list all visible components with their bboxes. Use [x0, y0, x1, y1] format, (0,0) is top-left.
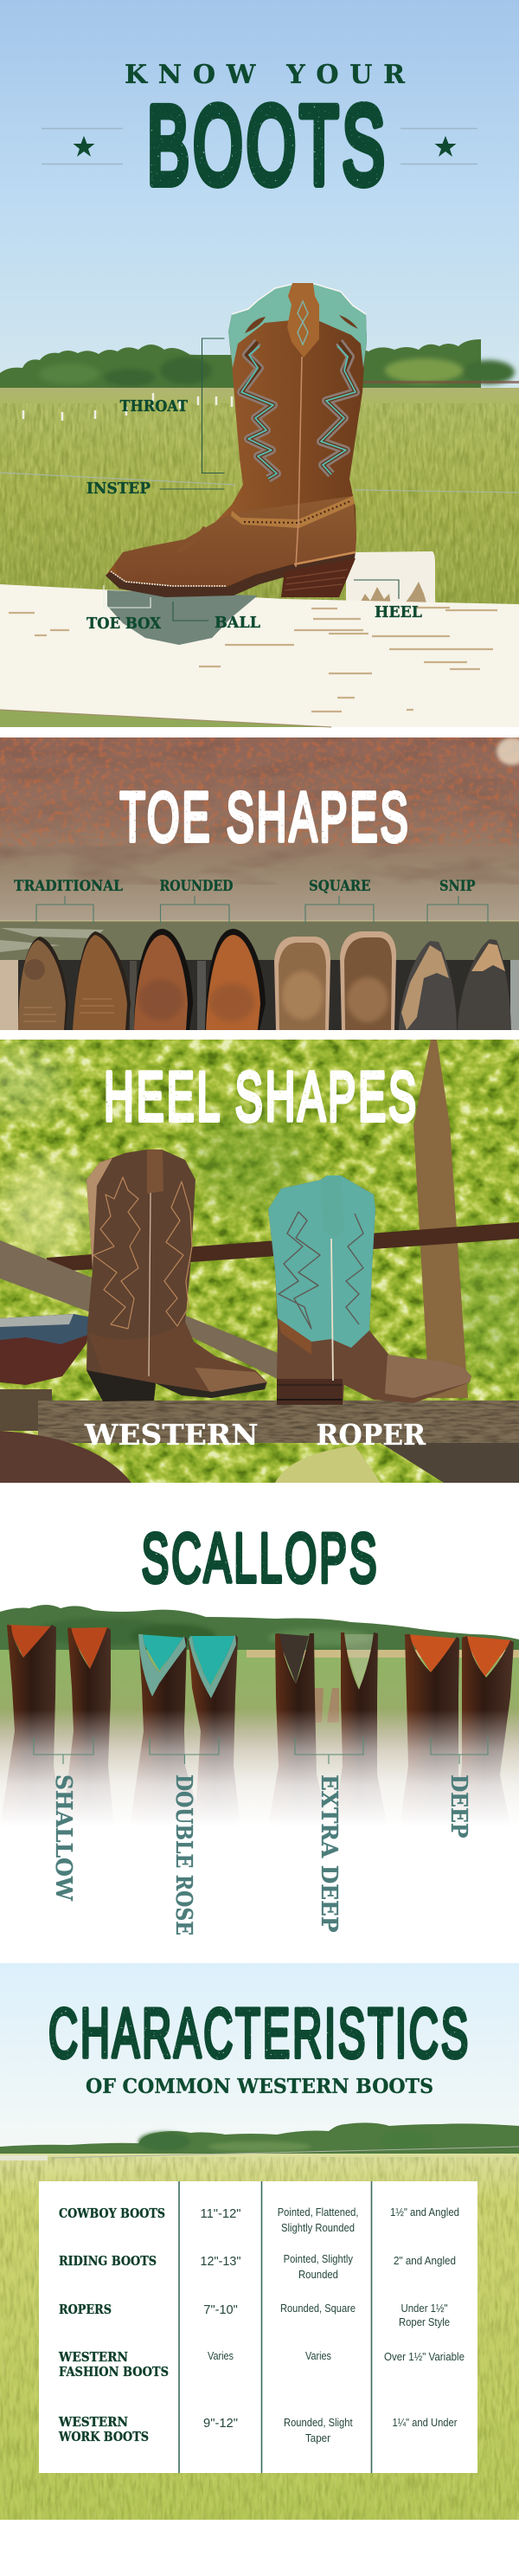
panel: scallops — [0, 1520, 519, 1935]
row: western work boots: WESTERN — [58, 2415, 128, 2430]
label: double rose: DOUBLE ROSE — [170, 1774, 196, 1935]
stitching: right — [321, 342, 356, 474]
rusty drum object — [0, 1314, 91, 1385]
label: shallow — [34, 1737, 93, 1902]
label: traditional: TRADITIONAL — [14, 878, 123, 894]
row: western work boots: 9"-12" — [203, 2416, 238, 2431]
label: deep — [431, 1737, 488, 1839]
label: shallow: SHALLOW — [50, 1774, 76, 1902]
row: cowboy boots: Pointed, Flattened, — [278, 2206, 358, 2219]
row: western work boots: Rounded, Slight — [284, 2416, 353, 2429]
row: cowboy boots: 11"-12" — [201, 2206, 240, 2221]
row: western fashion boots: Over 1½" Variable — [384, 2350, 465, 2363]
turquoise collar — [228, 284, 367, 368]
center seam — [296, 357, 302, 567]
roper boot stitching — [279, 1212, 363, 1329]
sole — [106, 551, 356, 597]
label: traditional — [14, 878, 123, 924]
row: western fashion boots: Varies — [208, 2349, 234, 2362]
row: cowboy boots: COWBOY BOOTS — [59, 2206, 165, 2221]
label: western: WESTERN — [84, 1418, 259, 1452]
snip toe boots — [399, 939, 511, 1030]
pair: double rose scallop boots — [130, 1634, 240, 1826]
row: cowboy boots: 1½" and Angled — [390, 2206, 459, 2219]
callout: ball: BALL — [215, 615, 260, 632]
label: rounded: ROUNDED — [159, 878, 234, 894]
row: riding boots — [59, 2252, 456, 2281]
row: western work boots: WORK BOOTS — [58, 2430, 149, 2444]
row: western fashion boots — [58, 2349, 465, 2380]
star ornament right — [400, 128, 477, 164]
callout: toe box — [86, 585, 161, 633]
row: western work boots: 1¼" and Under — [393, 2416, 458, 2429]
foot vamp — [114, 496, 356, 593]
perforated welt band — [231, 496, 355, 528]
label: extra deep — [295, 1737, 363, 1932]
callout: heel — [354, 580, 422, 621]
panel: know your boots anatomy — [0, 0, 519, 727]
western boot — [86, 1150, 267, 1401]
stitching: left — [241, 342, 277, 479]
row: western fashion boots: FASHION BOOTS — [59, 2365, 169, 2380]
white fence post — [346, 551, 435, 606]
pair: shallow scallop boots — [0, 1625, 114, 1826]
row: ropers: 7"-10" — [203, 2302, 238, 2317]
pair: deep scallop boots — [400, 1634, 514, 1826]
callout: throat: THROAT — [119, 398, 188, 415]
rusty metal backdrop — [0, 737, 519, 921]
label: square — [305, 878, 374, 924]
grass field — [0, 381, 519, 604]
pair: extra deep scallop boots — [268, 1633, 388, 1826]
label: deep: DEEP — [445, 1774, 471, 1839]
row: western work boots: Taper — [305, 2431, 331, 2444]
panel: heel shapes — [0, 1040, 519, 1483]
foliage backdrop — [0, 1040, 519, 1483]
label: extra deep: EXTRA DEEP — [316, 1774, 342, 1932]
callout: heel: HEEL — [375, 604, 422, 621]
row: ropers: Under 1½" — [401, 2302, 448, 2315]
white fade overlay — [0, 1710, 519, 1848]
label: snip: SNIP — [439, 878, 476, 894]
label: rounded — [159, 878, 234, 924]
lower scene objects — [0, 1431, 519, 1483]
rounded toe boots — [134, 929, 266, 1030]
row: western work boots — [58, 2415, 458, 2444]
callout: throat — [119, 338, 225, 473]
square toe boots — [274, 931, 396, 1030]
treeline — [0, 2122, 519, 2155]
row: riding boots: 12"-13" — [201, 2254, 240, 2269]
diagonal plank — [0, 1240, 278, 1379]
row: cowboy boots — [59, 2206, 459, 2234]
row: riding boots: 2" and Angled — [394, 2254, 456, 2267]
row: western fashion boots: WESTERN — [58, 2350, 128, 2365]
row: ropers: Rounded, Square — [280, 2302, 356, 2315]
panel: characteristics — [0, 1963, 519, 2520]
row: ropers: Roper Style — [399, 2315, 450, 2328]
comparison table — [39, 2181, 477, 2473]
wooden shelf beam — [0, 1389, 519, 1443]
label: snip — [427, 878, 488, 924]
faded field — [0, 1605, 519, 1839]
grass field — [0, 2147, 519, 2520]
callout: toe box: TOE BOX — [86, 615, 161, 633]
row: ropers — [59, 2302, 450, 2328]
panel: toe shapes — [0, 737, 519, 1030]
boot shadow — [107, 590, 258, 645]
callout: ball — [173, 602, 260, 632]
white fence rail — [0, 584, 519, 727]
roper boot — [268, 1175, 471, 1405]
subtitle: OF COMMON WESTERN BOOTS — [86, 2075, 433, 2098]
callout: instep: INSTEP — [86, 480, 151, 498]
star ornament left — [42, 128, 123, 164]
horizontal pipe rail — [47, 1222, 519, 1272]
row: riding boots: RIDING BOOTS — [59, 2254, 157, 2269]
western boot stitching — [93, 1177, 192, 1329]
wooden post — [413, 1040, 468, 1398]
label: roper: ROPER — [317, 1418, 426, 1452]
concrete ledge — [0, 920, 519, 1030]
title: know your: KNOW YOUR — [125, 60, 406, 90]
stacked heel — [281, 558, 356, 597]
row: ropers: ROPERS — [59, 2302, 112, 2317]
label: double rose — [150, 1737, 219, 1935]
boot shaft and foot — [106, 284, 367, 597]
row: cowboy boots: Slightly Rounded — [281, 2221, 355, 2234]
traditional toe boots — [18, 931, 131, 1030]
pull strap — [287, 283, 319, 357]
label: square: SQUARE — [309, 878, 370, 894]
treeline — [0, 339, 515, 388]
row: western fashion boots: Varies — [305, 2349, 331, 2362]
row: riding boots: Rounded — [298, 2268, 338, 2281]
main boot illustration — [106, 283, 367, 597]
row: riding boots: Pointed, Slightly — [284, 2252, 353, 2265]
